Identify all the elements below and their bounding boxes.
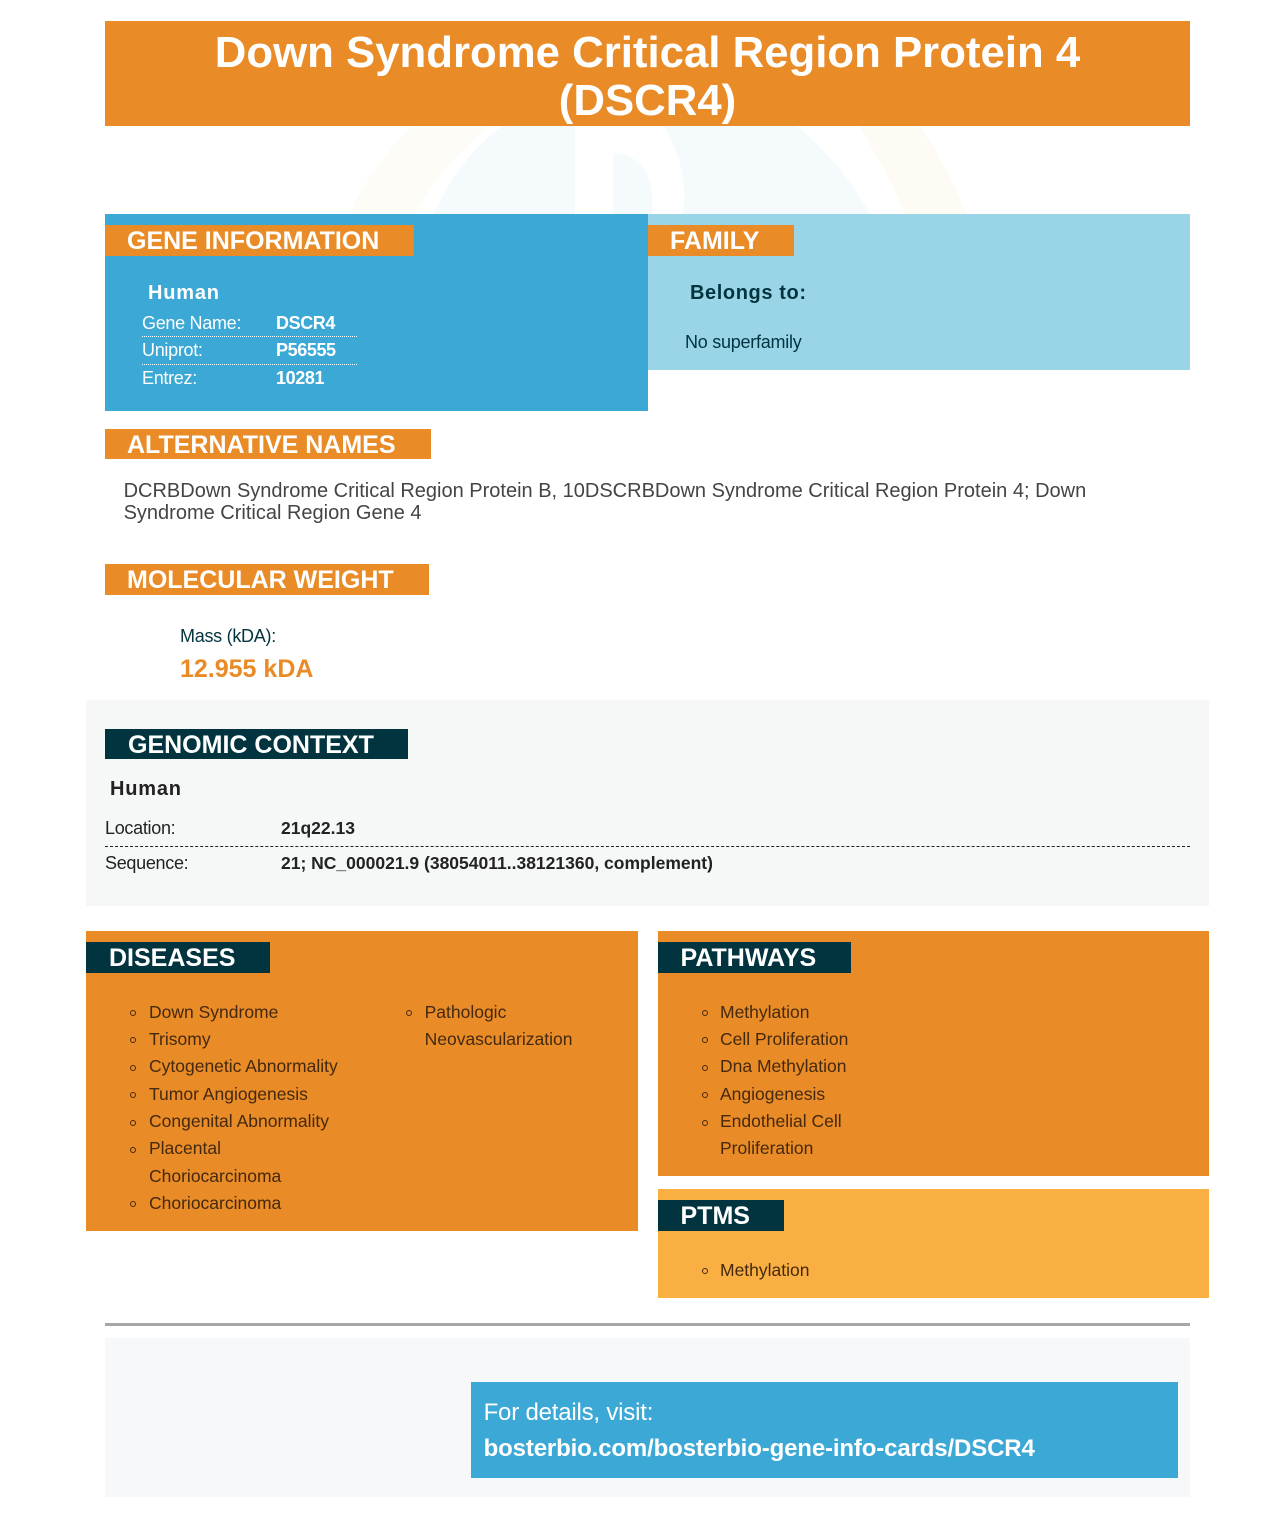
- heading: pathways: [658, 942, 850, 973]
- panel: diseases: [86, 931, 638, 1231]
- pathway list: Methylation: [720, 1002, 810, 1022]
- disease list: Pathologic: [425, 1002, 506, 1022]
- gene name row: DSCR4: [276, 313, 335, 333]
- heading: genomic context: GENOMIC CONTEXT: [128, 731, 374, 759]
- callout: details link: [471, 1382, 1178, 1478]
- panel: genomic context: [86, 700, 1209, 906]
- ptm list: Methylation: [720, 1260, 810, 1280]
- panel: footer: [105, 1338, 1190, 1497]
- uniprot row: Uniprot:: [142, 340, 203, 360]
- pathway list: Dna Methylation: [720, 1056, 846, 1076]
- disease list: Choriocarcinoma: [149, 1166, 281, 1186]
- disease list: Trisomy: [149, 1029, 211, 1049]
- heading: ptms: [658, 1200, 784, 1231]
- heading: diseases: [86, 942, 270, 973]
- alternative names text: DCRBDown Syndrome Critical Region Protein B, 10DSCRBDown Syndrome Critical Region Protein 4; Down Syndrome Critical Region Gene 4: [124, 480, 1086, 524]
- disease list: [130, 1002, 572, 1213]
- background watermark logo: [350, 126, 966, 214]
- details label: For details, visit:: [484, 1399, 653, 1426]
- panel: pathways: [658, 931, 1209, 1176]
- details url: bosterbio.com/bosterbio-gene-info-cards/DSCR4: [484, 1435, 1035, 1462]
- heading: molecular weight: MOLECULAR WEIGHT: [127, 566, 394, 594]
- entrez row: [142, 368, 324, 388]
- belongs to label: Belongs to:: [690, 282, 807, 304]
- sequence row: Sequence:: [105, 853, 188, 873]
- uniprot row: P56555: [276, 340, 336, 360]
- title: Down Syndrome Critical Region Protein 4: [215, 28, 1080, 76]
- panel: gene information: [105, 214, 648, 411]
- gene name row: Gene Name:: [142, 313, 241, 333]
- pathway list: Cell Proliferation: [720, 1029, 848, 1049]
- panel: genomic context: 21; NC_000021.9 (38054011..38121360, complement): [281, 853, 713, 873]
- disease list: Placental: [149, 1138, 221, 1158]
- location row: [105, 818, 1190, 847]
- pathway list: Endothelial Cell: [720, 1111, 842, 1131]
- location row: 21q22.13: [281, 818, 355, 838]
- disease list: Neovascularization: [425, 1029, 572, 1049]
- heading: family: [648, 225, 794, 256]
- pathway list: [702, 1002, 848, 1158]
- mass value: 12.955 kDA: [180, 654, 313, 682]
- disease list: Choriocarcinoma: [149, 1193, 281, 1213]
- disease list: Tumor Angiogenesis: [149, 1084, 308, 1104]
- title: [105, 21, 1190, 126]
- entrez row: 10281: [276, 368, 324, 388]
- pathway list: Proliferation: [720, 1138, 813, 1158]
- sequence row: [105, 853, 713, 873]
- family value: No superfamily: [685, 332, 802, 352]
- uniprot row: [142, 340, 357, 365]
- location row: Location:: [105, 818, 175, 838]
- heading: pathways: PATHWAYS: [680, 944, 816, 972]
- heading: alternative names: ALTERNATIVE NAMES: [127, 431, 396, 459]
- heading: ptms: PTMS: [680, 1202, 750, 1230]
- pathway list: Angiogenesis: [720, 1084, 825, 1104]
- species label: Human: [110, 778, 182, 800]
- heading: family: FAMILY: [670, 227, 759, 255]
- gene name row: [142, 313, 357, 337]
- panel: ptms: [658, 1189, 1209, 1298]
- disease list: Cytogenetic Abnormality: [149, 1056, 338, 1076]
- species label: Human: [148, 282, 220, 304]
- disease list: Down Syndrome: [149, 1002, 278, 1022]
- heading: diseases: DISEASES: [109, 944, 235, 972]
- entrez row: Entrez:: [142, 368, 197, 388]
- heading: gene information: GENE INFORMATION: [127, 227, 379, 255]
- mass label: Mass (kDA):: [180, 626, 276, 646]
- footer rule: [105, 1323, 1190, 1326]
- disease list: Congenital Abnormality: [149, 1111, 329, 1131]
- title: (DSCR4): [559, 76, 736, 124]
- panel: family: [648, 214, 1190, 370]
